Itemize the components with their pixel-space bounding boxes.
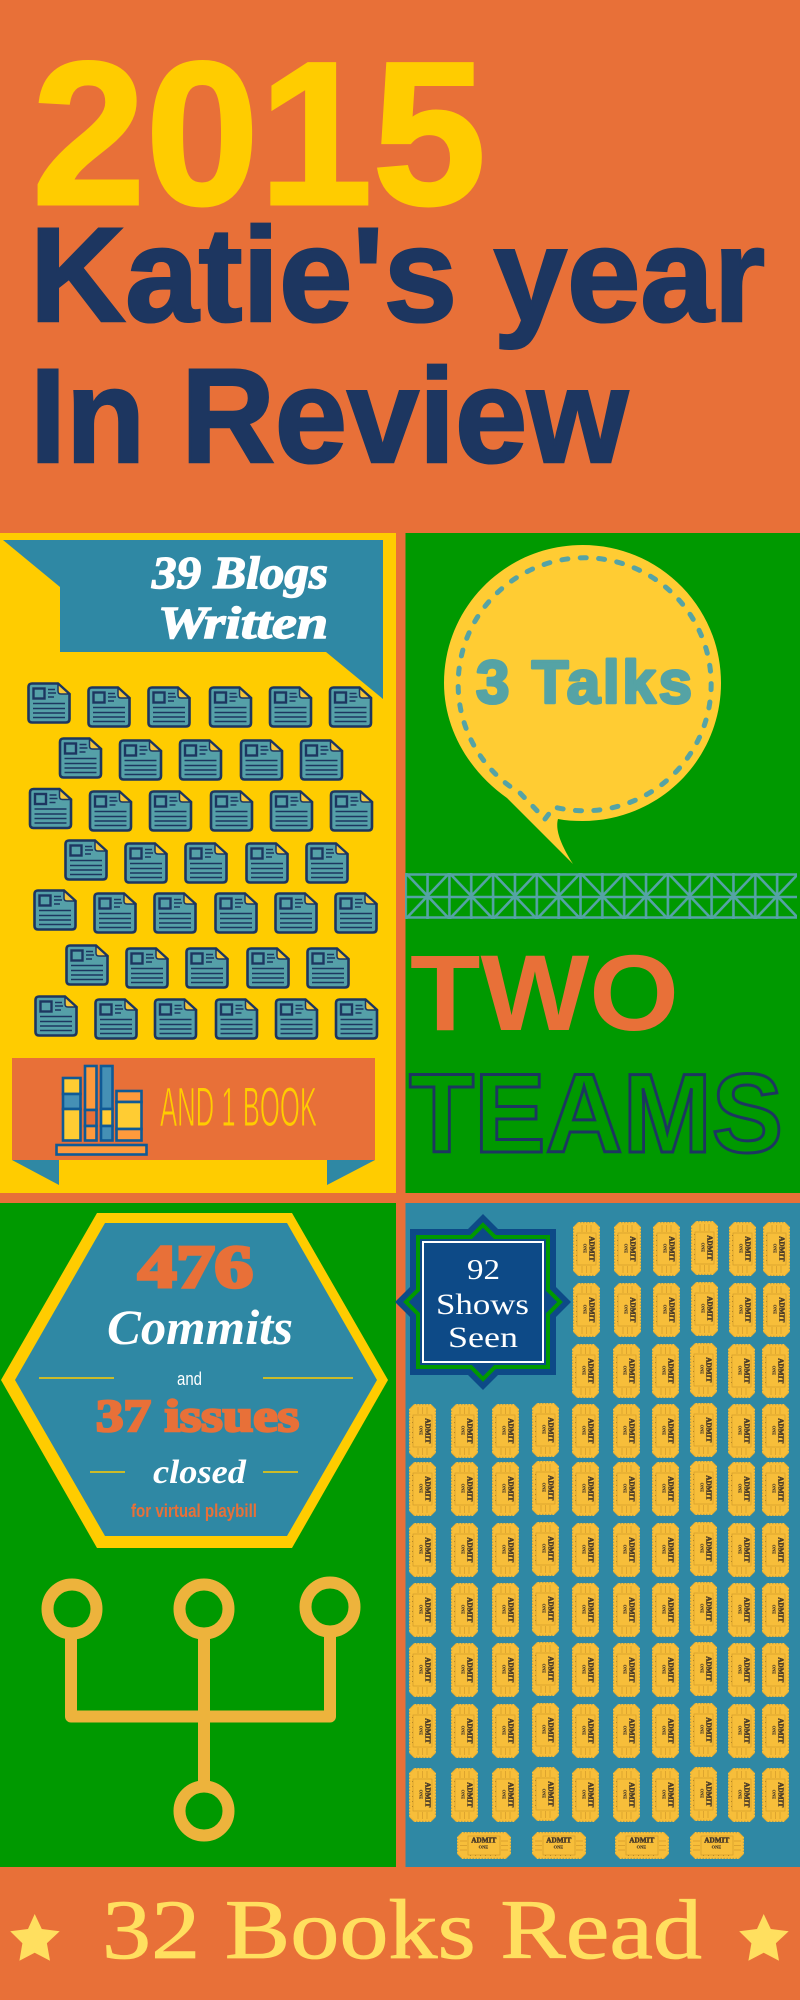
speech bubble: 3 talks: 3 Talks [476, 649, 692, 716]
panel: shows [395, 1203, 800, 1867]
footer text: 32 Books Read [102, 1883, 702, 1977]
hexagon: commits and issues: and [177, 1369, 202, 1389]
title [30, 20, 765, 491]
title line: In Review: In Review [30, 342, 629, 491]
document icon grid [28, 684, 377, 1038]
hexagon: commits and issues: 37 issues [96, 1391, 299, 1441]
truss bridge [405, 873, 797, 919]
hexagon: commits and issues: for virtual playbill [131, 1501, 257, 1521]
heading: teams outline: TEAMS [409, 1051, 783, 1176]
banner: 39 blogs written: Written [158, 597, 328, 648]
badge: 92 shows seen: Seen [448, 1321, 518, 1354]
panel: talks and teams [405, 533, 800, 1193]
hexagon: commits and issues: closed [153, 1454, 247, 1491]
icon: right star [739, 1914, 789, 1961]
ribbon: and 1 book: AND 1 BOOK [160, 1075, 317, 1138]
icon: git branch [48, 1582, 354, 1836]
hexagon: commits and issues: 476 [138, 1234, 253, 1300]
hexagon: commits and issues: Commits [107, 1299, 293, 1355]
hexagon: commits and issues [1, 1213, 388, 1548]
badge: 92 shows seen: Shows [436, 1288, 529, 1321]
panel: commits [0, 1203, 396, 1867]
heading: two: TWO [410, 932, 679, 1053]
badge: 92 shows seen [395, 1214, 571, 1390]
title year: 2015 [32, 20, 486, 248]
banner: 39 blogs written: 39 Blogs [151, 547, 328, 598]
badge: 92 shows seen: 92 [467, 1254, 500, 1286]
ribbon: and 1 book [12, 1058, 375, 1185]
icon: books on shelf [56, 1066, 146, 1154]
ticket grid [410, 1222, 789, 1858]
footer: 32 books read [10, 1883, 789, 1977]
speech bubble: 3 talks [444, 545, 721, 864]
title line: Katie's year: Katie's year [30, 201, 765, 350]
banner: 39 blogs written [3, 540, 383, 699]
panel: blogs [0, 533, 396, 1193]
icon: left star [10, 1914, 60, 1961]
